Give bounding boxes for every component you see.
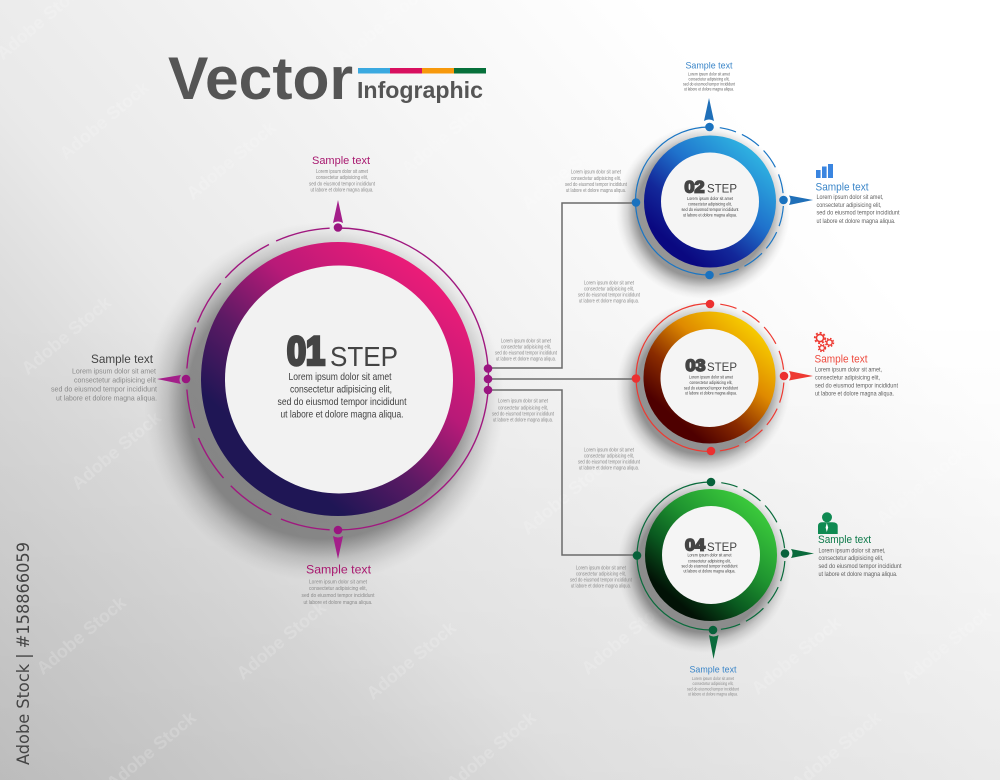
callout: bottom: ut labore et dolore magna aliqua. bbox=[688, 692, 738, 696]
connector captions: consectetur adipisicing elit, bbox=[584, 454, 634, 460]
step heading bbox=[684, 177, 737, 196]
callout: top: Lorem ipsum dolor sit amet bbox=[316, 169, 368, 175]
callout: top bbox=[683, 60, 736, 92]
step heading: 01 bbox=[287, 330, 325, 374]
callout: right bbox=[814, 354, 898, 397]
vertical credit text: Adobe Stock | #158866059 bbox=[14, 542, 33, 765]
callout: right bbox=[818, 534, 902, 578]
watermarks: Adobe Stock bbox=[518, 452, 615, 538]
connector captions bbox=[492, 170, 640, 590]
connector captions: ut labore et dolore magna aliqua. bbox=[493, 418, 553, 424]
title bbox=[168, 45, 486, 112]
connector captions: Lorem ipsum dolor sit amet bbox=[584, 448, 634, 454]
callout: right: sed do eiusmod tempor incididunt bbox=[818, 563, 902, 570]
callout: top: Lorem ipsum dolor sit amet bbox=[688, 72, 731, 77]
connector captions: consectetur adipisicing elit, bbox=[498, 405, 548, 411]
step body text: ut labore et dolore magna aliqua. bbox=[684, 569, 736, 574]
step 01 shadow bbox=[144, 222, 504, 582]
callout: right: consectetur adipisicing elit, bbox=[815, 374, 880, 381]
icon: gears bbox=[815, 333, 834, 352]
step heading: STEP bbox=[707, 540, 737, 554]
connector captions: Lorem ipsum dolor sit amet bbox=[498, 399, 548, 405]
callout: bottom: Lorem ipsum dolor sit amet bbox=[692, 676, 735, 681]
callout: bottom: Sample text bbox=[306, 562, 372, 576]
watermarks: Adobe Stock bbox=[18, 292, 115, 378]
watermarks: Adobe Stock bbox=[233, 597, 330, 683]
connector captions: Lorem ipsum dolor sit amet bbox=[584, 280, 634, 286]
callout: right: Lorem ipsum dolor sit amet, bbox=[816, 194, 884, 201]
step body text bbox=[682, 196, 739, 219]
dots bbox=[633, 478, 789, 634]
callout: top: ut labore et dolore magna aliqua. bbox=[310, 188, 374, 194]
thin dashed ring bbox=[636, 127, 784, 275]
callout: top: consectetur adipisicing elit, bbox=[688, 77, 730, 82]
step heading: 02 bbox=[684, 177, 704, 196]
callout: bottom: consectetur adipisicing elit, bbox=[309, 586, 367, 592]
step heading: STEP bbox=[707, 182, 737, 196]
callout: right: consectetur adipisicing elit, bbox=[818, 555, 884, 562]
step heading bbox=[686, 356, 737, 375]
step body text: Lorem ipsum dolor sit amet bbox=[687, 196, 734, 202]
connector captions: consectetur adipisicing elit, bbox=[576, 572, 626, 578]
callout: right: Lorem ipsum dolor sit amet, bbox=[815, 366, 882, 373]
callout: top: sed do eiusmod tempor incididunt bbox=[309, 181, 375, 187]
callout: left: ut labore et dolore magna aliqua. bbox=[56, 394, 157, 403]
step body text bbox=[682, 553, 738, 574]
arrows bbox=[704, 98, 813, 205]
callout: bottom: ut labore et dolore magna aliqua. bbox=[304, 600, 373, 606]
watermarks: Adobe Stock bbox=[698, 67, 795, 153]
connector lines bbox=[488, 203, 637, 555]
connector captions: Lorem ipsum dolor sit amet bbox=[571, 170, 621, 176]
gradient ring bbox=[645, 489, 777, 621]
connector captions: ut labore et dolore magna aliqua. bbox=[579, 299, 639, 305]
step body text: consectetur adipisicing elit, bbox=[290, 384, 392, 396]
title: Vector bbox=[168, 45, 353, 112]
callout: right: Lorem ipsum dolor sit amet, bbox=[818, 547, 886, 554]
callout: right: sed do eiusmod tempor incididunt bbox=[816, 210, 900, 217]
watermarks: Adobe Stock bbox=[33, 592, 130, 678]
subtitle: Infographic bbox=[357, 77, 483, 103]
gradient ring bbox=[644, 136, 776, 268]
step body text: ut labore et dolore magna aliqua. bbox=[280, 408, 404, 420]
watermarks: Adobe Stock bbox=[56, 77, 153, 163]
watermarks: Adobe Stock bbox=[748, 612, 845, 698]
step body text: consectetur adipisicing elit, bbox=[690, 380, 732, 385]
dots bbox=[182, 223, 492, 534]
panel: step 02 bbox=[632, 60, 900, 279]
gradient ring bbox=[201, 242, 475, 516]
callout: bottom bbox=[302, 562, 375, 606]
step body text: Lorem ipsum dolor sit amet bbox=[689, 374, 734, 379]
step heading: STEP bbox=[330, 341, 398, 372]
step heading bbox=[685, 535, 737, 554]
step body text: sed do eiusmod tempor incididunt bbox=[682, 564, 738, 569]
callout: left: sed do eiusmod tempor incididunt bbox=[51, 385, 157, 394]
callout: right: ut labore et dolore magna aliqua. bbox=[818, 571, 898, 578]
step 04 shadow bbox=[617, 479, 791, 653]
panel: step 01 bbox=[51, 155, 492, 606]
step body text: sed do eiusmod tempor incididunt bbox=[278, 396, 407, 408]
callout: right: Sample text bbox=[816, 182, 868, 194]
watermarks: Adobe Stock bbox=[518, 127, 615, 213]
panel: step 04 bbox=[633, 478, 902, 696]
watermarks: Adobe Stock bbox=[363, 617, 460, 703]
callout: right: Sample text bbox=[818, 534, 871, 546]
gradient ring bbox=[644, 312, 776, 444]
inner disc bbox=[225, 266, 453, 494]
step body text bbox=[278, 371, 407, 420]
watermarks: Adobe Stock bbox=[838, 107, 935, 193]
step heading: 03 bbox=[686, 356, 706, 375]
step heading bbox=[287, 330, 398, 374]
step body text: consectetur adipisicing elit, bbox=[688, 202, 732, 208]
step 03 shadow bbox=[616, 301, 790, 475]
step body text: Lorem ipsum dolor sit amet bbox=[688, 553, 732, 558]
step body text: consectetur adipisicing elit, bbox=[688, 558, 731, 563]
inner disc bbox=[662, 506, 760, 604]
step body text: ut labore et dolore magna aliqua. bbox=[683, 213, 737, 219]
thin dashed ring bbox=[636, 304, 784, 452]
panel: step 03 bbox=[632, 300, 898, 455]
connector captions: sed do eiusmod tempor incididunt bbox=[495, 351, 557, 357]
callout: bottom bbox=[687, 664, 740, 696]
callout: left: Lorem ipsum dolor sit amet bbox=[72, 367, 156, 376]
callout: right: sed do eiusmod tempor incididunt bbox=[815, 382, 898, 389]
callout: bottom: Lorem ipsum dolor sit amet bbox=[309, 580, 367, 586]
watermarks: Adobe Stock bbox=[183, 117, 280, 203]
connector captions: ut labore et dolore magna aliqua. bbox=[496, 357, 556, 363]
thin dashed ring bbox=[186, 228, 488, 530]
step body text: sed do eiusmod tempor incididunt bbox=[682, 207, 739, 213]
callout: left bbox=[51, 352, 157, 403]
connector captions: sed do eiusmod tempor incididunt bbox=[565, 182, 627, 188]
callout: right: ut labore et dolore magna aliqua. bbox=[816, 218, 896, 225]
inner disc bbox=[660, 329, 758, 427]
watermarks: Adobe Stock bbox=[68, 407, 165, 493]
callout: top: consectetur adipisicing elit, bbox=[316, 175, 368, 181]
icon: person bbox=[818, 512, 838, 534]
callout: top: Sample text bbox=[686, 60, 733, 70]
connector captions: Lorem ipsum dolor sit amet bbox=[576, 566, 626, 572]
step body text bbox=[684, 374, 739, 396]
watermarks: Adobe Stock bbox=[398, 92, 495, 178]
connector captions: Lorem ipsum dolor sit amet bbox=[501, 338, 551, 344]
watermarks: Adobe Stock bbox=[873, 442, 970, 528]
connector captions: sed do eiusmod tempor incididunt bbox=[492, 411, 554, 417]
title colour bar bbox=[358, 68, 486, 74]
connector captions: sed do eiusmod tempor incididunt bbox=[578, 292, 640, 298]
inner disc bbox=[661, 152, 759, 250]
callout: bottom: sed do eiusmod tempor incididunt bbox=[302, 593, 375, 599]
watermarks: Adobe Stock bbox=[578, 592, 675, 678]
connector captions: consectetur adipisicing elit, bbox=[584, 286, 634, 292]
step heading: 04 bbox=[685, 535, 706, 554]
connector captions: consectetur adipisicing elit, bbox=[501, 345, 551, 351]
arrow bbox=[789, 371, 813, 380]
callout: bottom: sed do eiusmod tempor incididunt bbox=[687, 686, 740, 691]
callout: top: Sample text bbox=[312, 155, 371, 167]
dots bbox=[632, 300, 788, 455]
connector captions: ut labore et dolore magna aliqua. bbox=[566, 188, 626, 194]
callout: top: ut labore et dolore magna aliqua. bbox=[684, 87, 734, 92]
connector captions: sed do eiusmod tempor incididunt bbox=[570, 578, 632, 584]
callout: left: consectetur adipisicing elit bbox=[74, 376, 156, 385]
watermarks: Adobe Stock bbox=[893, 252, 990, 338]
callout: bottom: consectetur adipisicing elit, bbox=[692, 681, 734, 686]
connector captions: ut labore et dolore magna aliqua. bbox=[571, 584, 631, 590]
callout: right: consectetur adipisicing elit, bbox=[816, 202, 882, 209]
connector captions: ut labore et dolore magna aliqua. bbox=[579, 466, 639, 472]
step body text: Lorem ipsum dolor sit amet bbox=[288, 371, 392, 383]
callout: top bbox=[309, 155, 375, 194]
arrows bbox=[709, 549, 814, 659]
step body text: sed do eiusmod tempor incididunt bbox=[684, 385, 739, 390]
step heading: STEP bbox=[707, 360, 737, 374]
callout: top: sed do eiusmod tempor incididunt bbox=[683, 82, 736, 87]
connector captions: consectetur adipisicing elit, bbox=[571, 176, 621, 182]
watermarks: Adobe Stock bbox=[898, 602, 995, 688]
connector captions: sed do eiusmod tempor incididunt bbox=[578, 460, 640, 466]
dots bbox=[632, 123, 788, 279]
callout: right: Sample text bbox=[814, 354, 868, 366]
step body text: ut labore et dolore magna aliqua. bbox=[685, 391, 737, 396]
callout: right: ut labore et dolore magna aliqua. bbox=[815, 390, 894, 397]
arrows bbox=[157, 200, 343, 559]
callout: bottom: Sample text bbox=[690, 664, 737, 674]
icon: bar chart bbox=[816, 164, 833, 178]
callout: right bbox=[816, 182, 900, 225]
thin dashed ring bbox=[637, 482, 785, 630]
callout: left: Sample text bbox=[91, 352, 154, 366]
step 02 shadow bbox=[616, 125, 790, 299]
